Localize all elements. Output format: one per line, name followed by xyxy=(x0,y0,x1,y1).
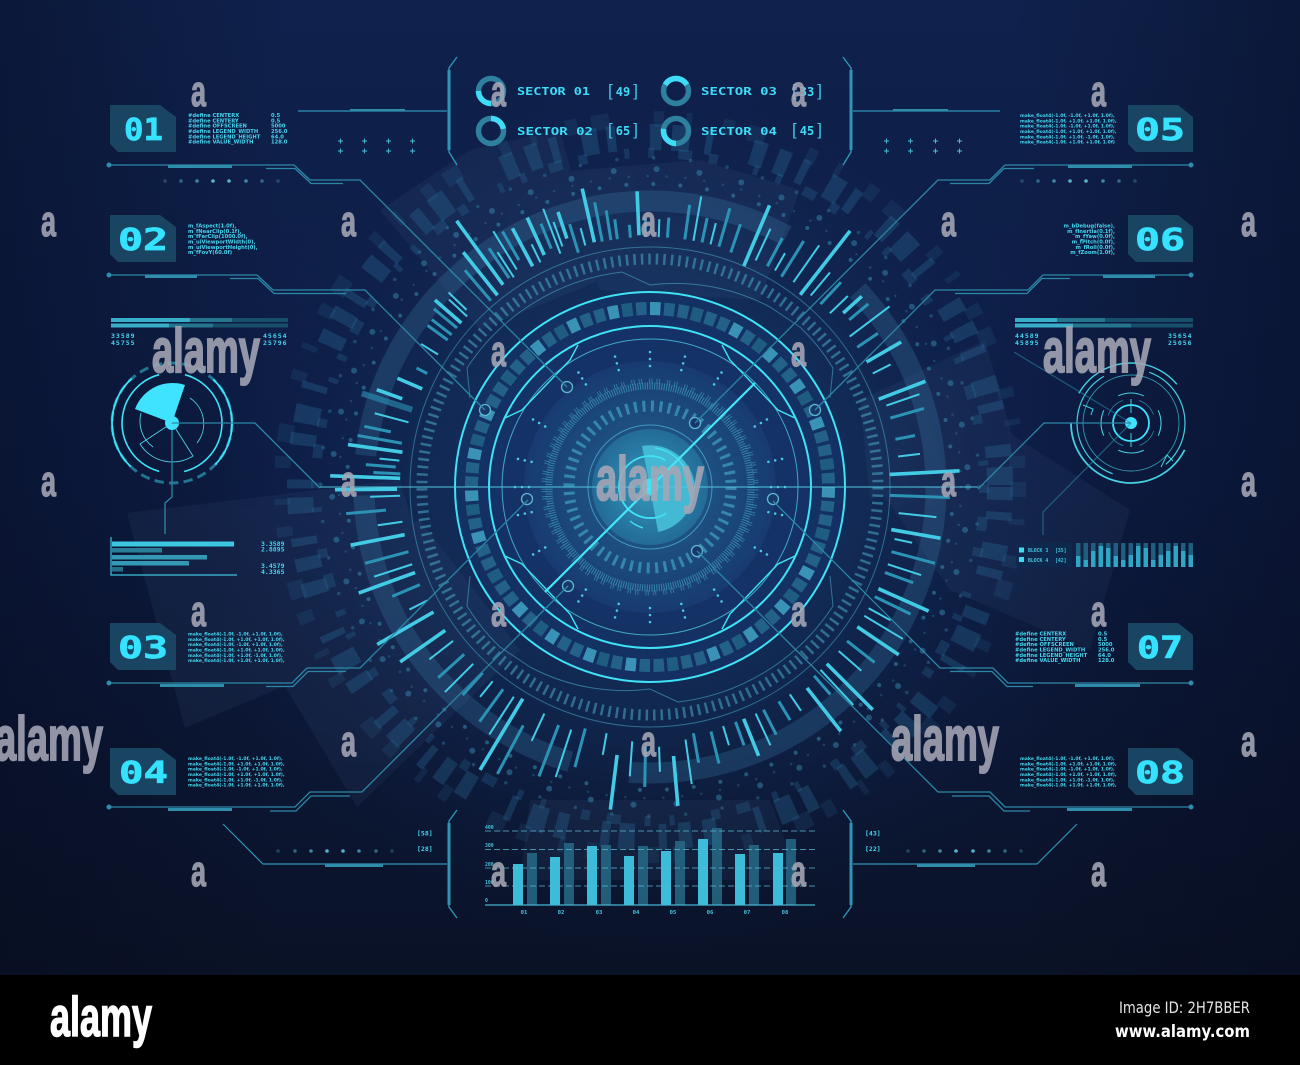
sector 04: [45] xyxy=(792,120,822,139)
label 04 xyxy=(106,586,568,811)
label 01: #define VALUE_WIDTH xyxy=(188,140,253,146)
panel: bottom bar chart: 04 xyxy=(633,910,640,916)
side values: [58] xyxy=(417,830,433,838)
bright bars xyxy=(330,189,960,810)
label 07: 64.0 xyxy=(1098,653,1111,659)
watermarks: a xyxy=(41,197,56,246)
label 05: make_float4(-1.0f, +1.0f, +1.0f, 1.0f), xyxy=(1020,129,1117,135)
translucent wedges xyxy=(127,130,1130,880)
radial bars xyxy=(330,189,960,810)
label 07: 07 xyxy=(1137,631,1183,666)
watermarks: a xyxy=(1091,67,1106,116)
sector 02: SECTOR 02 xyxy=(517,125,593,138)
equalizer bars xyxy=(1076,543,1193,567)
label 05: make_float4(-1.0f, -1.0f, +1.0f, 1.0f), xyxy=(1020,124,1115,130)
watermarks: alamy xyxy=(1043,317,1151,386)
label 04: 04 xyxy=(119,756,168,791)
horizontal bar chart: 3.3589 xyxy=(261,540,285,548)
panel: top sector legend xyxy=(298,57,1000,165)
watermarks: a xyxy=(341,457,356,506)
label 08: make_float4(-1.0f, -1.0f, +1.0f, 1.0f), xyxy=(1020,756,1115,762)
label 02 xyxy=(106,215,485,410)
label 08: make_float4(-1.0f, +1.0f, +1.0f, 1.0f), xyxy=(1020,783,1117,789)
label 07: #define CENTERY xyxy=(1015,637,1066,643)
footer strip xyxy=(0,975,1300,1065)
horizontal bar chart: 3.4579 xyxy=(261,562,285,570)
label 07 xyxy=(773,501,1194,687)
hub disc xyxy=(592,429,708,545)
label 01: #define LEGEND_WIDTH xyxy=(188,129,258,135)
front bars xyxy=(513,839,783,905)
label 06: m_fZoom(1.0f), xyxy=(1070,250,1115,256)
watermarks: a xyxy=(491,327,506,376)
readouts: 35654 xyxy=(1168,332,1193,340)
sector 01: SECTOR 01 xyxy=(517,85,590,98)
label 06: m_fInertia(0.1f), xyxy=(1067,229,1115,235)
sector 03 xyxy=(659,74,822,108)
label 04: make_float4(-1.0f, -1.0f, +1.0f, 1.0f), xyxy=(188,756,283,762)
radar dial xyxy=(1049,341,1213,505)
axis labels: 400 xyxy=(485,825,494,831)
hub rings xyxy=(608,445,692,529)
sector 03: [33] xyxy=(792,81,822,100)
watermarks: a xyxy=(341,717,356,766)
watermarks: a xyxy=(191,587,206,636)
sector 03: SECTOR 03 xyxy=(701,85,777,98)
watermarks: a xyxy=(791,587,806,636)
label 03: make_float4(-1.0f, +1.0f, +1.0f, 1.0f), xyxy=(188,648,285,654)
sector 01: [49] xyxy=(608,81,638,100)
sector 04 xyxy=(664,118,822,144)
label 03: make_float4(-1.0f, +1.0f, -1.0f, 1.0f), xyxy=(188,653,283,659)
horizontal bar chart: 2.8895 xyxy=(261,546,285,554)
core glow disc xyxy=(524,361,776,613)
label 01 xyxy=(106,105,567,387)
label 04: make_float4(-1.0f, +1.0f, -1.0f, 1.0f), xyxy=(188,777,283,783)
label 01: 01 xyxy=(124,113,163,148)
label 07: 128.0 xyxy=(1098,658,1115,664)
label 06: m_fRoll(0.0f), xyxy=(1075,245,1115,251)
panel: bottom bar chart: 01 xyxy=(521,910,528,916)
label 02: m_fFarClip(1000.0f), xyxy=(188,234,248,240)
side values: [22] xyxy=(865,845,881,853)
watermarks: a xyxy=(41,457,56,506)
back bars xyxy=(527,828,796,905)
thin filler bars xyxy=(370,196,936,784)
label 02: m_uiViewportHeight(0), xyxy=(188,245,258,251)
readouts: 45895 xyxy=(1015,339,1040,347)
label 08: make_float4(-1.0f, -1.0f, +1.0f, 1.0f), xyxy=(1020,767,1115,773)
watermarks: a xyxy=(191,67,206,116)
block legend: BLOCK 4 xyxy=(1028,558,1048,564)
panel: bottom bar chart xyxy=(223,810,1077,918)
sector 02 xyxy=(478,118,638,144)
label 07: #define OFFSCREEN xyxy=(1015,642,1074,648)
watermarks: a xyxy=(491,847,506,896)
horizontal bar chart: 4.3365 xyxy=(261,568,285,576)
watermarks: a xyxy=(641,197,656,246)
label 04: make_float4(-1.0f, +1.0f, +1.0f, 1.0f), xyxy=(188,761,285,767)
panel: bottom bar chart: 07 xyxy=(744,910,750,916)
side values: [28] xyxy=(417,845,433,853)
footer strip: www.alamy.com xyxy=(1115,1022,1250,1042)
watermarks: alamy xyxy=(596,445,704,514)
watermarks: alamy xyxy=(152,317,260,386)
sector 04: SECTOR 04 xyxy=(701,125,777,138)
block legend xyxy=(1016,543,1072,567)
panel: bottom bar chart: 05 xyxy=(670,910,676,916)
watermarks: alamy xyxy=(891,705,999,774)
axis labels: 100 xyxy=(485,880,494,886)
watermarks: a xyxy=(641,717,656,766)
label 05: 05 xyxy=(1135,113,1185,148)
label 01: 0.5 xyxy=(271,113,281,119)
bracket tabs xyxy=(325,864,975,867)
watermarks: a xyxy=(491,587,506,636)
crosshair lines xyxy=(320,383,978,592)
sector 01 xyxy=(478,78,638,104)
label 03 xyxy=(106,500,528,687)
segmented block ring xyxy=(472,308,828,666)
watermarks: a xyxy=(1241,197,1256,246)
label 06: m_fPitch(0.0f), xyxy=(1072,240,1115,246)
label 04: make_float4(-1.0f, +1.0f, +1.0f, 1.0f), xyxy=(188,783,285,789)
label 03: make_float4(-1.0f, +1.0f, +1.0f, 1.0f), xyxy=(188,637,285,643)
small dot groups xyxy=(515,352,785,622)
watermarks: a xyxy=(1091,587,1106,636)
fine tick rings xyxy=(544,381,756,593)
brackets xyxy=(223,810,1077,918)
connector lines xyxy=(165,423,320,534)
inner disc xyxy=(455,292,845,682)
label 01: 0.5 xyxy=(271,118,281,124)
watermarks: alamy xyxy=(0,705,103,774)
label 01: #define LEGEND_HEIGHT xyxy=(188,134,261,140)
watermarks xyxy=(0,67,1256,896)
dot rings xyxy=(321,158,979,816)
connector lines xyxy=(978,423,1131,489)
panel: bottom bar chart: 06 xyxy=(707,910,714,916)
label 08 xyxy=(697,551,1194,811)
watermarks: a xyxy=(941,457,956,506)
label 04: make_float4(-1.0f, -1.0f, +1.0f, 1.0f), xyxy=(188,767,283,773)
label 03: make_float4(-1.0f, +1.0f, +1.0f, 1.0f), xyxy=(188,658,285,664)
axis labels: 0 xyxy=(485,898,488,904)
watermarks: a xyxy=(1241,717,1256,766)
label 01: #define OFFSCREEN xyxy=(188,124,247,130)
node markers xyxy=(480,382,820,592)
label 01: #define CENTERY xyxy=(188,118,239,124)
central radar graphic xyxy=(282,119,1018,855)
readouts: 33589 xyxy=(111,332,136,340)
label 02: m_uiViewportWidth(0), xyxy=(188,240,256,246)
sector 02: [65] xyxy=(608,120,638,139)
radar dial xyxy=(87,338,257,508)
progress bars xyxy=(111,318,288,328)
side values: [43] xyxy=(865,830,881,838)
label 07: #define LEGEND_WIDTH xyxy=(1015,648,1085,654)
block legend: [35] xyxy=(1055,548,1067,554)
label 02: m_fNearClip(0.1f), xyxy=(188,229,241,235)
label 06: 06 xyxy=(1135,223,1185,258)
panel: bottom bar chart: 03 xyxy=(596,910,602,916)
label 03: make_float4(-1.0f, -1.0f, +1.0f, 1.0f), xyxy=(188,642,283,648)
axis labels: 300 xyxy=(485,843,494,849)
readouts: 44589 xyxy=(1015,332,1040,340)
readouts: 25796 xyxy=(263,339,288,347)
readouts: 25056 xyxy=(1168,339,1193,347)
panel: right radar xyxy=(978,318,1213,567)
watermarks: a xyxy=(191,847,206,896)
footer strip: alamy xyxy=(50,985,152,1048)
watermarks: a xyxy=(791,847,806,896)
watermarks: a xyxy=(1241,457,1256,506)
panel: bottom bar chart: 02 xyxy=(558,910,564,916)
brackets xyxy=(298,57,1000,165)
main cyan rings xyxy=(455,292,845,682)
label 01: 5000 xyxy=(271,124,286,130)
label 05: make_float4(-1.0f, +1.0f, +1.0f, 1.0f) xyxy=(1020,140,1115,146)
label 01: 256.0 xyxy=(271,129,288,135)
label 05: make_float4(-1.0f, +1.0f, +1.0f, 1.0f), xyxy=(1020,118,1117,124)
label 07: #define CENTERX xyxy=(1015,632,1066,638)
panel: bottom bar chart: 08 xyxy=(782,910,789,916)
label 04: make_float4(-1.0f, +1.0f, +1.0f, 1.0f), xyxy=(188,772,285,778)
translucent arc band xyxy=(364,201,936,773)
label 07: #define LEGEND_HEIGHT xyxy=(1015,653,1088,659)
faint connector lines xyxy=(1014,352,1131,535)
label 06: m_fYaw(0.0f), xyxy=(1075,234,1115,240)
readouts: 45755 xyxy=(111,339,136,347)
watermarks: a xyxy=(341,197,356,246)
label 01: #define CENTERX xyxy=(188,113,239,119)
label 08: 08 xyxy=(1135,756,1185,791)
label 08: make_float4(-1.0f, +1.0f, +1.0f, 1.0f), xyxy=(1020,772,1117,778)
plus marks xyxy=(338,138,962,154)
label 02: 02 xyxy=(118,223,168,258)
label 05 xyxy=(695,105,1194,423)
watermarks: a xyxy=(791,327,806,376)
label 03: make_float4(-1.0f, -1.0f, +1.0f, 1.0f), xyxy=(188,632,283,638)
label 07: 256.0 xyxy=(1098,648,1115,654)
medium bars xyxy=(346,202,950,787)
dot rows xyxy=(276,849,1023,853)
label 07: 5000 xyxy=(1098,642,1113,648)
watermarks: a xyxy=(791,67,806,116)
watermarks: a xyxy=(1091,847,1106,896)
footer strip: Image ID: 2H7BBER xyxy=(1119,998,1250,1017)
block legend: [42] xyxy=(1055,558,1067,564)
label 07: 0.5 xyxy=(1098,632,1108,638)
axis labels: 200 xyxy=(485,862,494,868)
label 08: make_float4(-1.0f, +1.0f, +1.0f, 1.0f), xyxy=(1020,761,1117,767)
label 06: m_bDebug(false), xyxy=(1063,224,1115,230)
horizontal bar chart xyxy=(111,537,285,576)
label 07: 0.5 xyxy=(1098,637,1108,643)
label 06 xyxy=(815,215,1194,410)
outer tick ring xyxy=(410,247,890,727)
label 01: 64.0 xyxy=(271,134,284,140)
label 05: make_float4(-1.0f, +1.0f, -1.0f, 1.0f), xyxy=(1020,134,1115,140)
label 02: m_fAspect(1.0f), xyxy=(188,224,236,230)
label 03: 03 xyxy=(118,631,168,666)
watermarks: a xyxy=(941,197,956,246)
progress bars xyxy=(1015,318,1193,328)
label 01: 128.0 xyxy=(271,140,288,146)
outer faint bar rings xyxy=(282,119,1018,855)
grid lines xyxy=(485,831,815,886)
bracket tabs xyxy=(350,109,948,112)
block legend: BLOCK 3 xyxy=(1028,548,1048,554)
hub wedge xyxy=(642,445,695,532)
label 05: make_float4(-1.0f, -1.0f, +1.0f, 1.0f), xyxy=(1020,113,1115,119)
readouts: 45654 xyxy=(263,332,288,340)
panel: left radar xyxy=(87,318,320,576)
watermarks: a xyxy=(491,67,506,116)
label 02: m_fFovY(60.0f) xyxy=(188,250,232,256)
label 08: make_float4(-1.0f, +1.0f, -1.0f, 1.0f), xyxy=(1020,777,1115,783)
label 07: #define VALUE_WIDTH xyxy=(1015,658,1080,664)
